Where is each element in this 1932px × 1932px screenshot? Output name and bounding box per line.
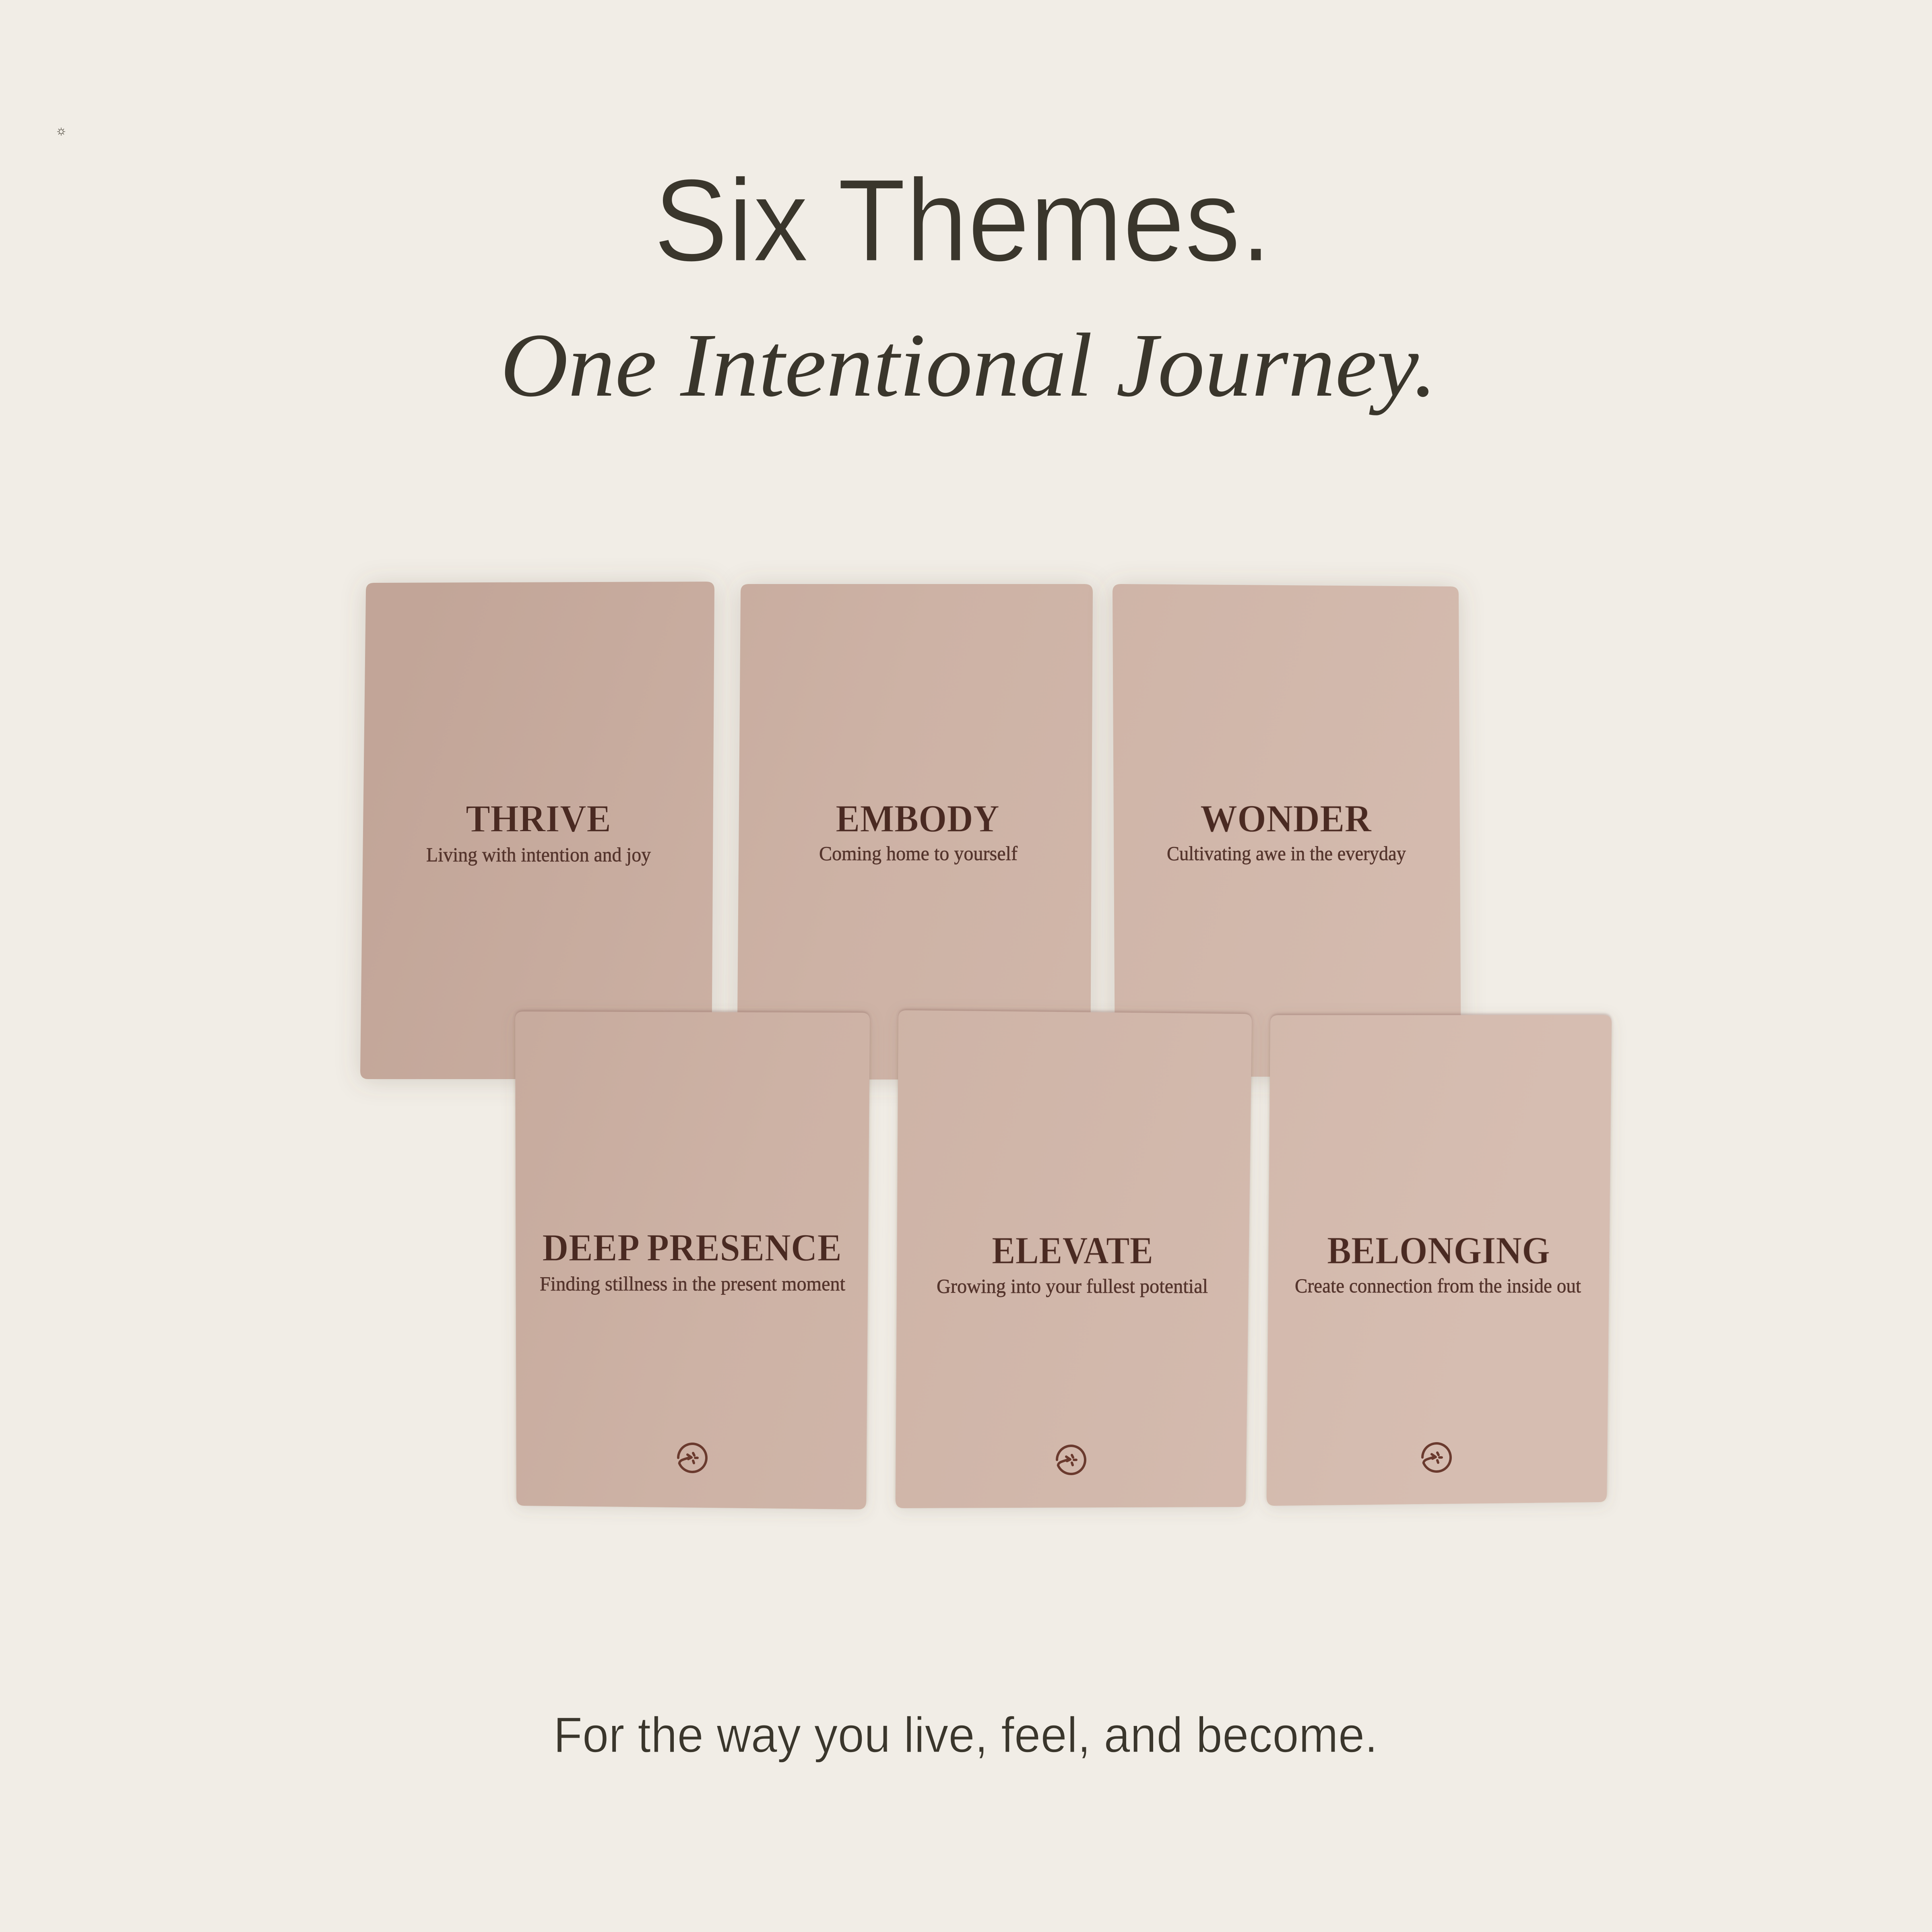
card title: deep presence: DEEP PRESENCE [542, 1226, 842, 1269]
panel: card belonging [1267, 1015, 1612, 1506]
card text: thrive: Living with intention and joy [426, 843, 651, 866]
panel: card deep presence [515, 1011, 870, 1509]
panel: card elevate [896, 1010, 1252, 1508]
card text: deep presence: Finding stillness in the present moment [540, 1272, 845, 1295]
icon: card logo [678, 1444, 706, 1472]
card title: embody: EMBODY [836, 797, 999, 840]
card text: belonging: Create connection from the inside out [1295, 1274, 1581, 1297]
card title: wonder: WONDER [1200, 797, 1372, 840]
subtitle: One Intentional Journey. [500, 315, 1437, 415]
card text: elevate: Growing into your fullest potential [937, 1275, 1208, 1297]
card title: belonging: BELONGING [1327, 1229, 1550, 1272]
icon: card logo [1057, 1446, 1085, 1474]
card text: wonder: Cultivating awe in the everyday [1167, 842, 1406, 865]
tagline: For the way you live, feel, and become. [553, 1707, 1378, 1763]
card title: elevate: ELEVATE [992, 1229, 1153, 1272]
icon: small sun [57, 128, 65, 136]
panel: card embody [737, 584, 1093, 1080]
panel: card wonder [1113, 584, 1461, 1077]
card text: embody: Coming home to yourself [819, 842, 1018, 865]
card title: thrive: THRIVE [466, 797, 611, 840]
panel: card thrive [360, 582, 714, 1079]
title: Six Themes. [654, 155, 1271, 286]
icon: card logo [1422, 1443, 1451, 1472]
